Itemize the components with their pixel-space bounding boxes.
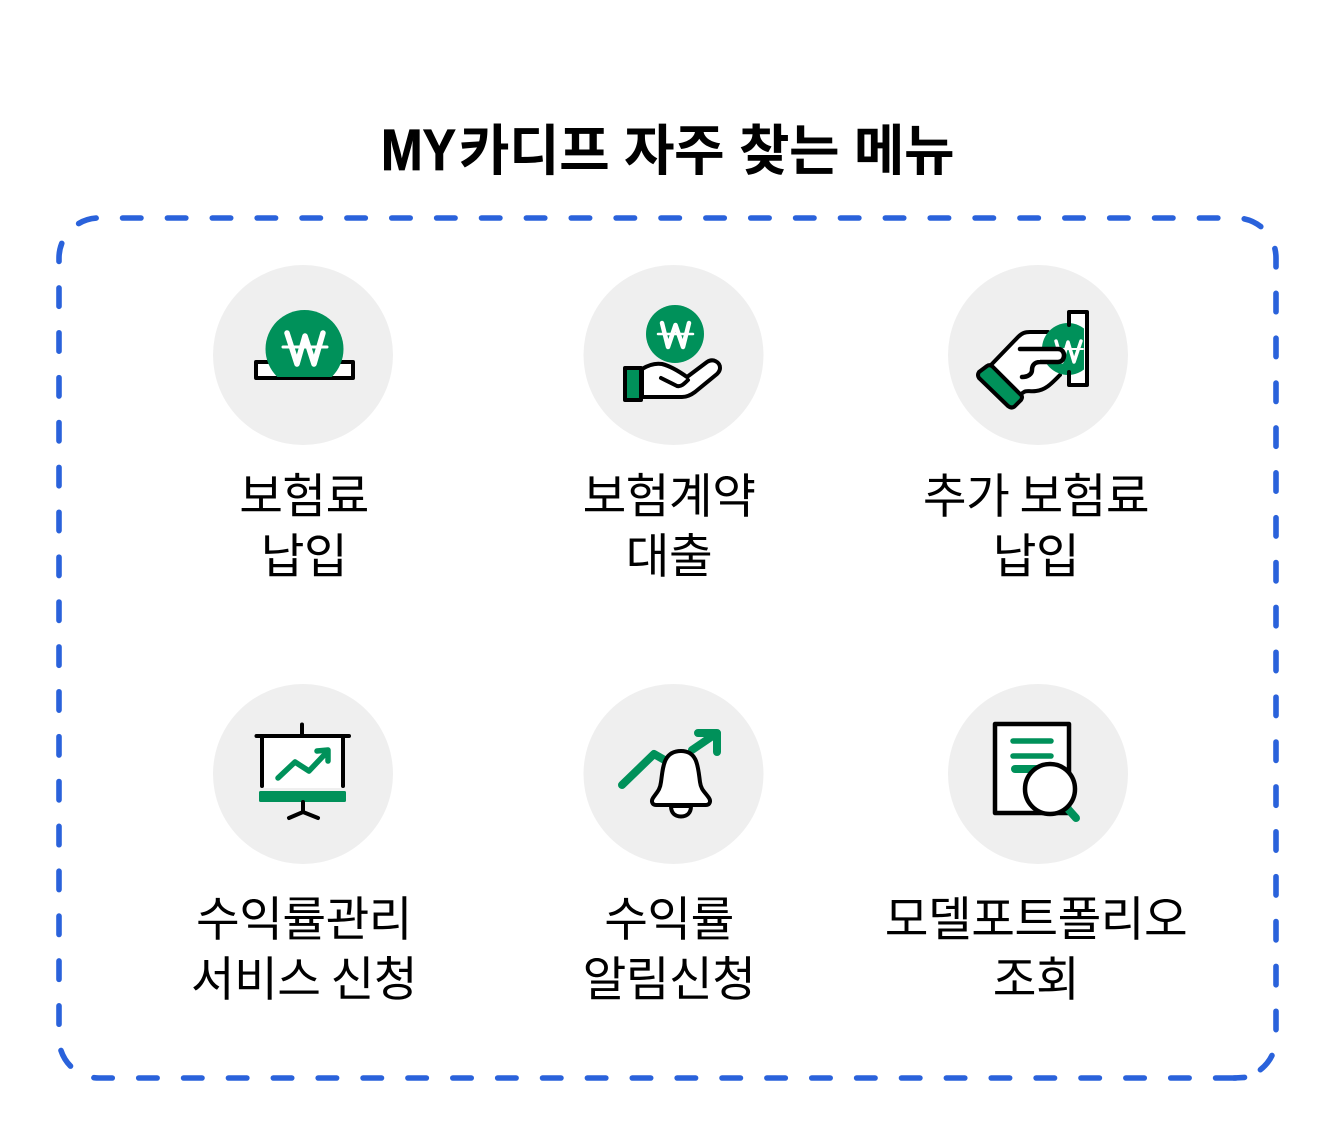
label line 2: 대출 xyxy=(626,531,712,584)
label: 추가 보험료 xyxy=(923,471,1149,524)
label: 모델포트폴리오 xyxy=(885,894,1187,947)
label line 2: 서비스 신청 xyxy=(191,954,417,1007)
label: 수익률 xyxy=(604,894,734,947)
menu item: return management service xyxy=(191,684,417,1007)
label line 2: 알림신청 xyxy=(583,954,755,1007)
menu item: portfolio inquiry xyxy=(885,684,1187,1007)
menu item: additional premium payment xyxy=(923,265,1149,584)
menu item: return alert xyxy=(583,684,764,1007)
title: MY xyxy=(381,119,456,183)
icon: hand receiving coin xyxy=(625,305,720,400)
label: 보험계약 xyxy=(583,471,755,524)
icon: hand inserting coin xyxy=(978,312,1094,408)
icon: presentation board xyxy=(256,724,349,818)
icon: coin in slot xyxy=(256,310,353,388)
label line 2: 납입 xyxy=(261,531,347,584)
title: 카디프 자주 찾는 메뉴 xyxy=(459,120,954,182)
label: 보험료 xyxy=(239,471,369,524)
label: 수익률관리 xyxy=(196,894,412,947)
label line 2: 조회 xyxy=(993,954,1079,1007)
icon: bell and rising arrow xyxy=(622,733,717,816)
icon: document and magnifier xyxy=(995,724,1076,818)
menu item: policy loan xyxy=(583,265,764,584)
label line 2: 납입 xyxy=(993,531,1079,584)
menu item: premium payment xyxy=(213,265,393,584)
panel: dashed menu frame xyxy=(59,218,1276,1078)
